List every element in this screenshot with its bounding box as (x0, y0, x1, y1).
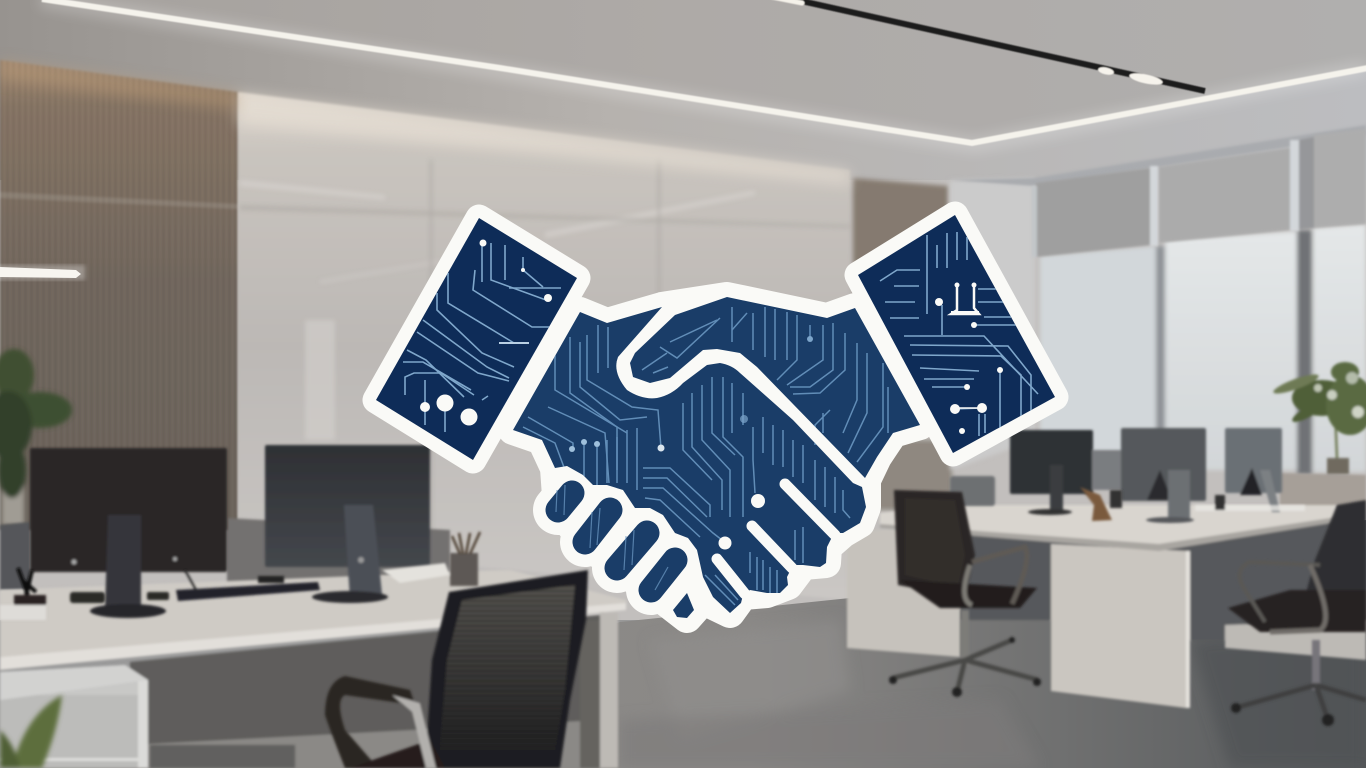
desk under panel (130, 615, 600, 768)
left drawer unit (0, 665, 148, 768)
right cuff nodes (935, 282, 1003, 434)
wall LED bar (0, 265, 85, 280)
ceiling LED cove line (40, 0, 1366, 145)
floor dark reflections (620, 620, 1366, 768)
under-desk dark zone (897, 515, 1340, 640)
right centre chair (889, 490, 1041, 697)
left hand body (513, 307, 866, 613)
small finger wedge (673, 593, 694, 618)
foreground leaf (0, 695, 62, 768)
window glass (1040, 224, 1366, 475)
finger capsule traces (556, 485, 668, 590)
right cuff (858, 215, 1055, 453)
right desktop (880, 505, 1337, 546)
black light track (770, 0, 1205, 91)
left plant (0, 349, 72, 525)
window sill (1280, 473, 1366, 520)
window blinds (1032, 129, 1366, 257)
low partition behind left desk (0, 522, 30, 590)
right desks (847, 505, 1366, 708)
left pedestal (847, 530, 960, 657)
left desk (0, 570, 626, 768)
hand circuit traces (523, 307, 888, 605)
left cuff traces (403, 243, 561, 432)
wall reflections (240, 160, 850, 580)
hand circuit nodes (569, 336, 813, 550)
desk clutter (1080, 487, 1305, 521)
brown slatted wall (0, 60, 238, 530)
white sticker outline (513, 297, 920, 618)
monitor left (30, 448, 227, 618)
monitor centre left (265, 445, 430, 603)
window soffit (950, 125, 1366, 186)
glossy white wall (238, 92, 850, 600)
back wall base (0, 180, 1366, 620)
wall cove glow (238, 92, 850, 185)
left cuff nodes (420, 240, 552, 426)
right plant (1272, 362, 1366, 474)
central pedestal (1051, 544, 1186, 708)
handshake emblem (376, 215, 1055, 618)
ceiling inner panel (0, 0, 1366, 200)
left cuff (376, 218, 577, 460)
brown wall right (853, 178, 948, 450)
white column and window wall (950, 178, 1035, 470)
desk leg (580, 620, 618, 768)
desk top (0, 570, 626, 657)
right monitors (950, 428, 1282, 523)
finger slits (717, 484, 835, 594)
finger capsules (558, 493, 675, 590)
floor (0, 520, 1366, 768)
right foreground chair (1228, 500, 1366, 726)
foreground chair left (150, 570, 588, 768)
ceiling outer strip (0, 0, 1366, 180)
keyboard and desk items (0, 532, 480, 620)
right back unit (1225, 620, 1366, 660)
right hand and thumb (630, 297, 920, 478)
right cuff traces (880, 232, 1038, 436)
